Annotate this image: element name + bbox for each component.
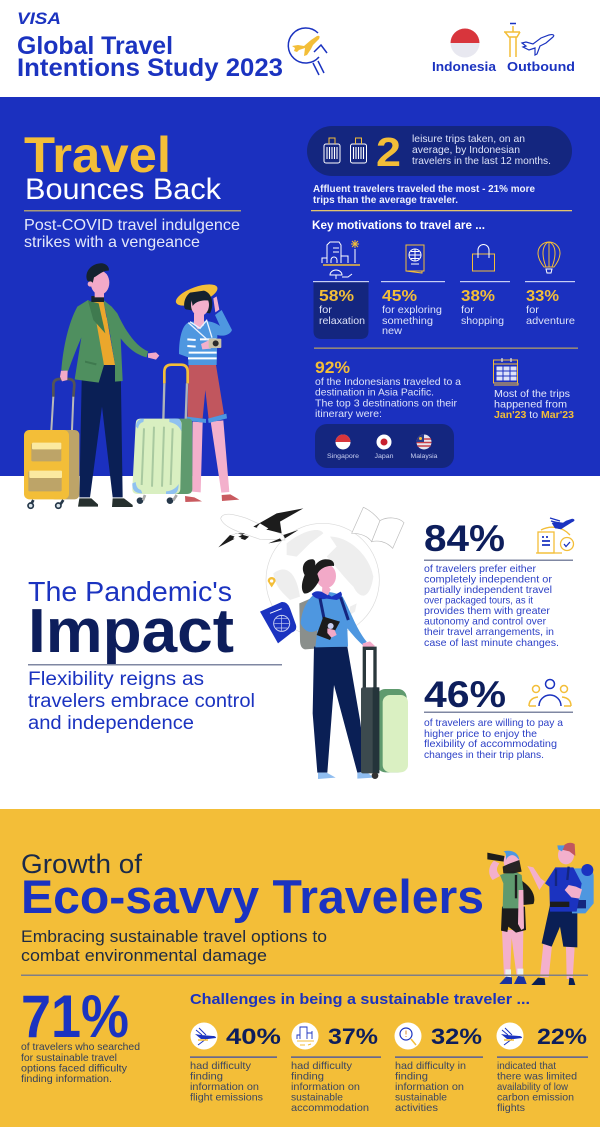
challenge: sustainable activities: information on <box>395 1081 464 1093</box>
challenge: sustainable accommodation: had difficulty <box>291 1060 353 1072</box>
motivation: exploring <box>381 245 445 337</box>
subheading: and independence <box>28 713 194 734</box>
book <box>352 507 404 548</box>
text: leisure trips: leisure trips taken, on an <box>412 133 525 145</box>
text: 84% description: provides them with greater <box>424 605 551 617</box>
icon: people <box>529 680 571 706</box>
icon: bag <box>472 245 494 271</box>
subheading <box>24 217 240 251</box>
stat: 71%: options faced difficulty <box>21 1062 128 1074</box>
stat: 92%: The top 3 destinations on their <box>315 398 457 410</box>
woman <box>173 280 239 502</box>
motivation: adventure <box>525 242 575 327</box>
text: 84% description: autonomy and control over <box>424 616 546 628</box>
text: most of the trips: happened from <box>494 398 567 410</box>
challenge: flight emissions: flight emissions <box>190 1092 263 1104</box>
subheading: strikes with a vengeance <box>24 234 200 251</box>
challenge: sustainable accommodation: information on <box>291 1081 360 1093</box>
motivation: relaxation <box>313 240 369 339</box>
stat: 71%: 71% <box>21 983 129 1050</box>
challenge: sustainable accommodation: accommodation <box>291 1102 369 1114</box>
text: affluent travelers <box>313 183 535 206</box>
heading: The Pandemic's <box>28 576 232 607</box>
text: 84% description: over packaged tours, as it <box>424 594 533 606</box>
subheading: travelers embrace control <box>28 691 255 712</box>
challenge: low carbon flights: flights <box>497 1102 525 1114</box>
text: most of the trips: Jan'23 to Mar'23 <box>494 409 574 421</box>
text: affluent travelers: trips than the average traveler. <box>313 194 458 206</box>
text: 84% description: their travel arrangements, in <box>424 626 554 638</box>
text: 46% description: of travelers are willing to pay a <box>424 717 563 729</box>
challenge: sustainable activities: activities <box>395 1102 438 1114</box>
woman hiker <box>487 851 534 984</box>
stat: 71%: of travelers who searched <box>21 1041 140 1053</box>
globe <box>266 523 379 637</box>
subheading <box>21 927 327 965</box>
subheading: Embracing sustainable travel options to <box>21 927 327 946</box>
stat: 71%: for sustainable travel <box>21 1052 117 1064</box>
challenge: sustainable accommodation: sustainable <box>291 1092 343 1104</box>
study title <box>17 32 283 82</box>
icon: resort <box>292 1022 318 1050</box>
motivation: relaxation: relaxation <box>319 315 365 327</box>
text: 46% description <box>424 717 563 761</box>
man <box>60 263 159 507</box>
man hiker <box>527 843 594 985</box>
heading: Travel Bounces Back <box>24 127 222 206</box>
airplane <box>218 508 303 547</box>
heading <box>21 849 484 923</box>
header <box>17 9 575 82</box>
icon: hotel and plane <box>536 518 574 553</box>
challenge: sustainable accommodation: finding <box>291 1070 324 1082</box>
heading: Travel Bounces Back: Bounces Back <box>25 173 222 206</box>
icon: Indonesia flag <box>450 28 480 58</box>
yellow suitcase <box>24 379 79 508</box>
motivation: shopping: 38% <box>461 288 495 305</box>
motivation: relaxation: 58% <box>319 288 354 305</box>
stat: 92%: 92% <box>315 359 350 377</box>
stat: 71% <box>21 983 140 1085</box>
heading: Travel Bounces Back: Travel <box>24 127 171 183</box>
stat: 92%: destination in Asia Pacific. <box>315 386 434 398</box>
illustration: hikers <box>487 843 594 985</box>
heading: Growth of <box>21 849 143 879</box>
challenge: sustainable activities: finding <box>395 1070 428 1082</box>
illustration: couple with suitcases <box>24 263 239 508</box>
challenge: low carbon flights: there was limited <box>497 1070 577 1082</box>
heading: challenges: Challenges in being a sustainable traveler ... <box>190 991 530 1008</box>
challenge: flight emissions: information on <box>190 1081 259 1093</box>
icon: plane <box>496 1022 524 1050</box>
panel: Eco-savvy Travelers <box>0 809 600 1127</box>
challenge: sustainable activities: had difficulty in <box>395 1060 466 1072</box>
panel: The Pandemic's Impact <box>28 507 574 779</box>
motivations <box>313 240 575 339</box>
label: Outbound: Outbound <box>507 59 575 74</box>
text: most of the trips <box>494 388 574 421</box>
text: 46% description: flexibility of accommodating <box>424 738 557 750</box>
challenge: low carbon flights: 22% <box>537 1024 587 1049</box>
text: leisure trips: travelers in the last 12 months. <box>412 155 551 167</box>
stat: 92%: of the Indonesians traveled to a <box>315 376 461 388</box>
text: 84% description: partially independent travel <box>424 584 552 596</box>
icon: magnifier <box>394 1022 422 1050</box>
callout: 2 leisure trips <box>307 126 572 176</box>
icon: suitcases <box>324 138 366 163</box>
challenge: low carbon flights: carbon emission <box>497 1092 574 1104</box>
panel: top destinations <box>315 424 454 468</box>
motivation: exploring: for exploring <box>382 304 442 316</box>
motivation: adventure: adventure <box>526 315 575 327</box>
stat: 46%: 46% <box>424 674 506 715</box>
text: 84% description <box>424 563 559 649</box>
suitcase <box>361 648 408 779</box>
panel: Travel Bounces Back <box>0 97 600 476</box>
text: 46% description: changes in their trip plans. <box>424 749 544 761</box>
motivation: shopping: shopping <box>461 315 504 327</box>
study title: Intentions Study 2023 <box>17 54 283 82</box>
text: most of the trips: Most of the trips <box>494 388 570 400</box>
motivation: relaxation: for <box>319 304 333 316</box>
flag: Malaysia: Malaysia <box>410 453 438 460</box>
motivation: adventure: 33% <box>526 288 559 305</box>
icon: passport <box>406 245 424 273</box>
text: 84% description: of travelers prefer either <box>424 563 537 575</box>
flag: Singapore: Singapore <box>327 453 359 460</box>
text: 84% description: completely independent or <box>424 574 553 586</box>
illustration: traveler with globe <box>218 507 408 779</box>
challenge: sustainable accommodation: 37% <box>328 1024 378 1049</box>
green suitcase <box>132 365 192 504</box>
challenge: sustainable activities: 32% <box>431 1024 482 1049</box>
icon: hot air balloon <box>538 242 560 273</box>
challenge: flight emissions: had difficulty <box>190 1060 252 1072</box>
text: leisure trips: average, by Indonesian <box>412 144 520 156</box>
challenge: flight emissions <box>190 1022 281 1104</box>
stat: 92% <box>315 359 461 420</box>
motivation: exploring: 45% <box>382 288 417 305</box>
text: leisure trips <box>412 133 551 167</box>
stat: 84%: 84% <box>424 518 505 559</box>
motivation: shopping <box>460 245 510 327</box>
icon: calendar <box>494 358 518 385</box>
challenge: sustainable accommodation <box>291 1022 381 1114</box>
text: 84% description: case of last minute changes. <box>424 637 559 649</box>
challenge: low carbon flights: indicated that <box>497 1060 556 1072</box>
icon: magnifier with plane <box>288 28 327 75</box>
passport <box>260 602 296 643</box>
motivation: exploring: something <box>382 315 433 327</box>
challenge: sustainable activities: sustainable <box>395 1092 447 1104</box>
stat: 46% <box>424 674 573 761</box>
icon: plane <box>190 1022 218 1050</box>
subheading: combat environmental damage <box>21 946 267 965</box>
icon: tower and plane <box>504 24 554 57</box>
challenge: flight emissions: 40% <box>226 1024 281 1049</box>
challenge: sustainable activities <box>394 1022 483 1114</box>
number: 2: 2 <box>376 129 401 175</box>
motivation: exploring: new <box>382 325 402 337</box>
Visa logo: VISA <box>17 9 61 28</box>
challenge: low carbon flights: availability of low <box>497 1081 568 1093</box>
subheading: Flexibility reigns as <box>28 669 204 690</box>
motivation: shopping: for <box>461 304 475 316</box>
subheading <box>28 669 255 734</box>
subheading: Post-COVID travel indulgence <box>24 217 240 234</box>
text: affluent travelers: Affluent travelers traveled the most - 21% more <box>313 183 535 195</box>
stat: 92%: itinerary were: <box>315 408 382 420</box>
stat: 71%: finding information. <box>21 1073 112 1085</box>
heading: Eco-savvy Travelers <box>21 870 484 923</box>
challenge: low carbon flights <box>496 1022 588 1114</box>
flag: Japan: Japan <box>374 453 394 460</box>
heading: Impact <box>28 597 234 666</box>
study title: Global Travel <box>17 32 173 60</box>
label: Indonesia: Indonesia <box>432 59 497 74</box>
woman traveler <box>299 559 375 779</box>
challenge: flight emissions: finding <box>190 1070 223 1082</box>
stat: 84% <box>424 518 574 649</box>
heading: key motivations: Key motivations to travel are ... <box>312 220 485 232</box>
motivation: adventure: for <box>526 304 540 316</box>
text: 46% description: higher price to enjoy the <box>424 728 537 740</box>
icon: location pin <box>268 577 276 587</box>
icon: resort <box>322 240 360 279</box>
